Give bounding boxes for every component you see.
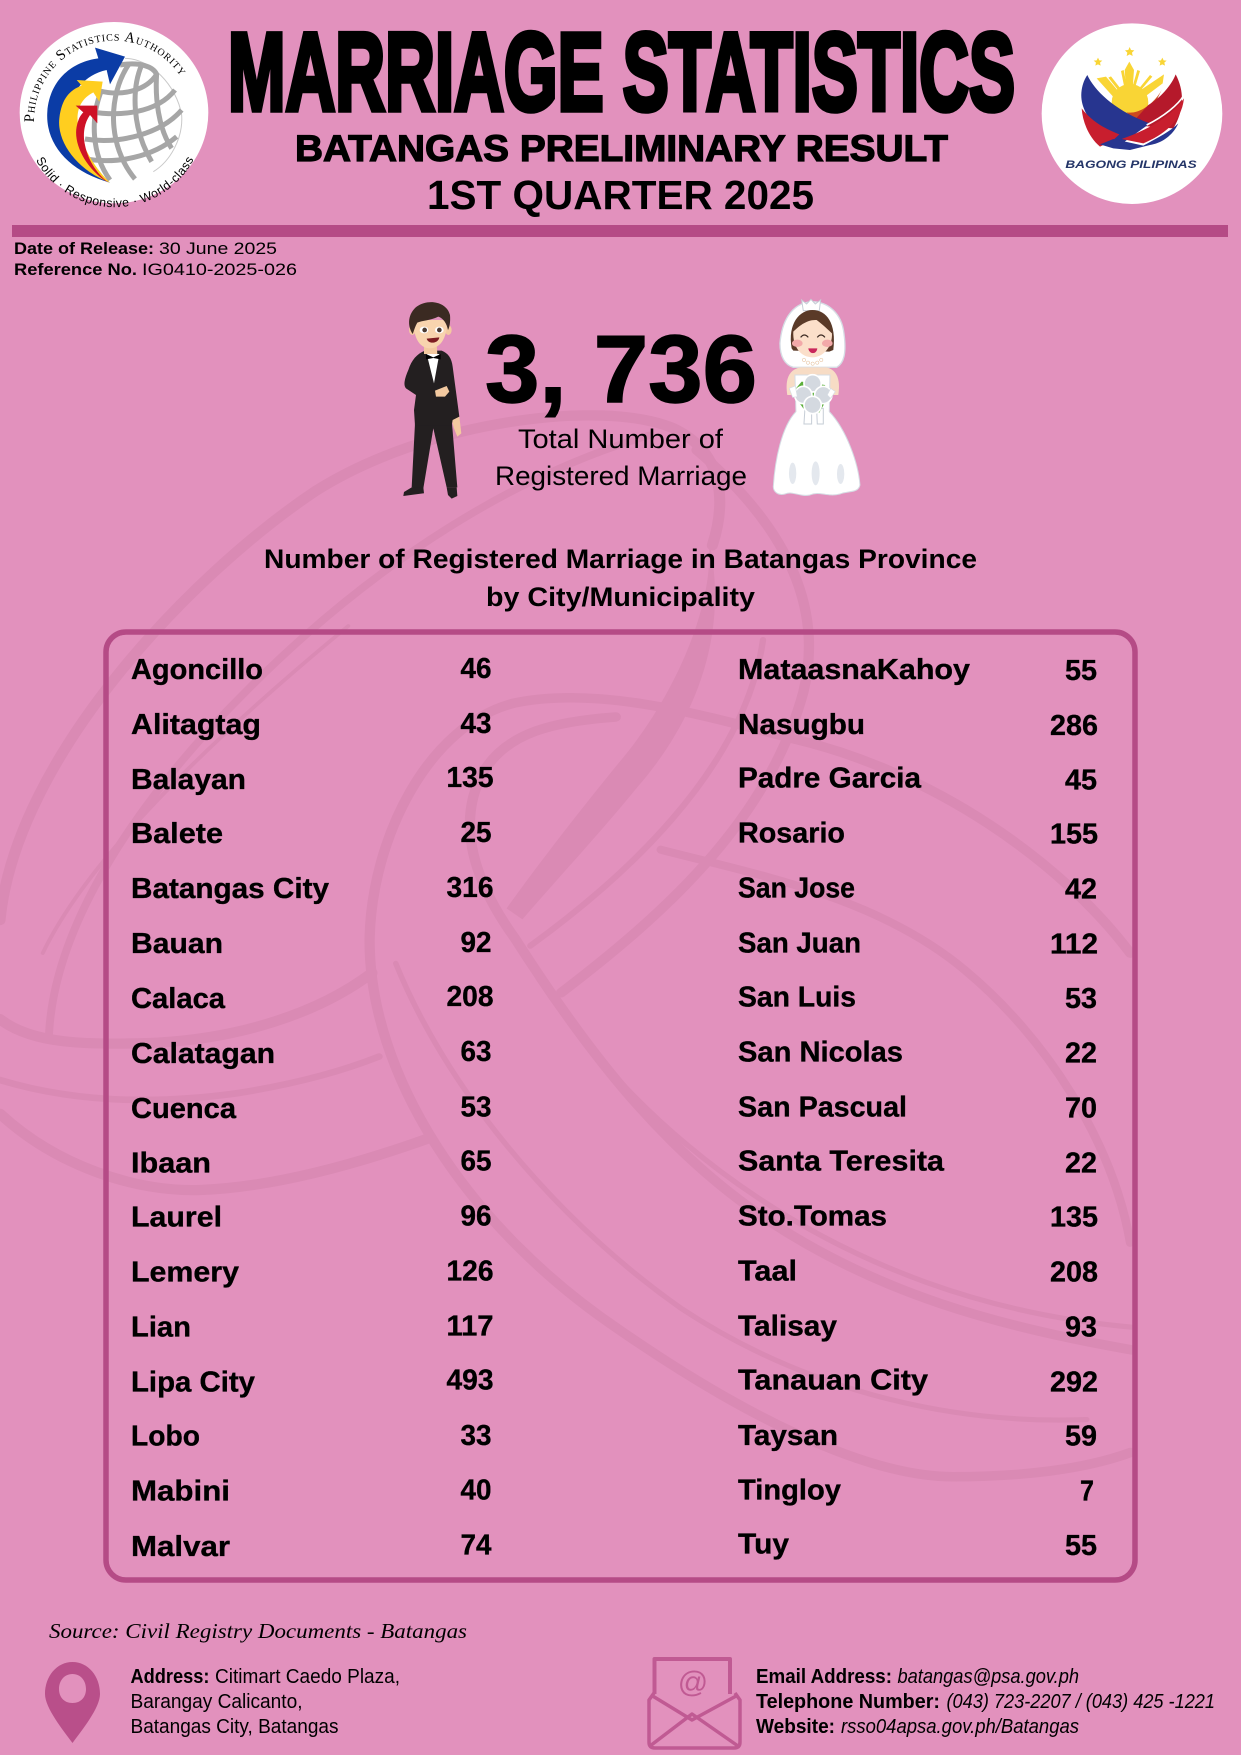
- row: Santa Teresita: Santa Teresita: [738, 1146, 945, 1178]
- row: Talisay: [738, 1310, 1097, 1344]
- logo: Bagong Pilipinas: [1042, 23, 1222, 204]
- heading: by city/municipality: [264, 544, 977, 612]
- contact details: Email Address:: [756, 1666, 892, 1688]
- row: Mabini: Mabini: [131, 1476, 230, 1508]
- row: Taysan: Taysan: [738, 1420, 838, 1452]
- row: Tuy: [738, 1528, 1097, 1562]
- row: Ibaan: 65: [460, 1146, 492, 1178]
- seal text: agency name: Philippine Statistics Authority: [24, 32, 186, 122]
- row: Calatagan: 63: [460, 1036, 492, 1068]
- row: Malvar: [131, 1530, 492, 1563]
- seal text: motto: Solid · Responsive · World-class: [37, 157, 193, 208]
- row: San Juan: San Juan: [738, 928, 861, 960]
- release date and reference number: [14, 239, 297, 279]
- row: Laurel: [131, 1200, 492, 1234]
- row: Balayan: [131, 762, 494, 796]
- address: Citimart Caedo Plaza,: [215, 1666, 400, 1688]
- row: Laurel: Laurel: [131, 1202, 222, 1234]
- row: Tingloy: [738, 1474, 1094, 1508]
- address: Batangas City, Batangas: [130, 1716, 338, 1738]
- row: San Nicolas: 22: [1065, 1038, 1097, 1070]
- subtitle: Batangas preliminary result: BATANGAS PRELIMINARY RESULT: [295, 128, 948, 169]
- row: Sto.Tomas: [738, 1200, 1098, 1234]
- row: Bauan: 92: [460, 927, 492, 959]
- row: Lian: [131, 1310, 494, 1344]
- release date and reference number: Date of Release:: [14, 239, 154, 258]
- row: Balete: 25: [460, 817, 492, 849]
- row: San Pascual: [738, 1092, 1097, 1124]
- row: Tanauan City: [738, 1364, 1098, 1398]
- row: Padre Garcia: 45: [1065, 764, 1097, 796]
- row: Batangas City: [131, 872, 494, 905]
- row: Balete: Balete: [131, 818, 223, 850]
- total number of registered marriage: Registered Marriage: [495, 461, 747, 491]
- panel frame: [106, 632, 1135, 1580]
- row: Calaca: [131, 981, 494, 1015]
- row: Malvar: 74: [460, 1530, 492, 1562]
- row: San Pascual: San Pascual: [738, 1092, 907, 1124]
- row: Lemery: Lemery: [131, 1256, 239, 1288]
- row: Tanauan City: Tanauan City: [738, 1364, 928, 1396]
- row: Calaca: Calaca: [131, 983, 226, 1015]
- row: Ibaan: [131, 1146, 492, 1180]
- row: Sto.Tomas: 135: [1050, 1202, 1098, 1234]
- row: Lipa City: [131, 1364, 494, 1398]
- row: San Luis: [738, 982, 1097, 1015]
- row: Batangas City: 316: [446, 872, 494, 904]
- row: Lemery: [131, 1256, 494, 1288]
- row: Alitagtag: Alitagtag: [131, 709, 261, 741]
- row: Lian: Lian: [131, 1312, 191, 1344]
- row: San Nicolas: San Nicolas: [738, 1036, 903, 1068]
- contact details: rsso04apsa.gov.ph/Batangas: [841, 1716, 1079, 1738]
- row: Cuenca: 53: [460, 1092, 492, 1124]
- row: Malvar: Malvar: [131, 1531, 230, 1563]
- release date and reference number: IG0410-2025-026: [142, 260, 297, 279]
- subtitle: quarter: 1ST QUARTER 2025: [427, 172, 814, 218]
- release date and reference number: Reference No.: [14, 260, 137, 279]
- row: Tingloy: 7: [1080, 1476, 1094, 1508]
- row: Lemery: 126: [446, 1256, 494, 1288]
- row: Calaca: 208: [446, 981, 494, 1013]
- row: Santa Teresita: [738, 1146, 1097, 1180]
- row: Agoncillo: Agoncillo: [131, 654, 263, 686]
- row: Taal: 208: [1050, 1256, 1098, 1288]
- row: Padre Garcia: Padre Garcia: [738, 762, 922, 794]
- row: Taal: [738, 1256, 1098, 1288]
- row: Agoncillo: 46: [460, 653, 492, 685]
- row: Balete: [131, 817, 492, 850]
- source note: Source: Civil Registry Documents - Batangas: [49, 1619, 467, 1643]
- row: MataasnaKahoy: [738, 654, 1097, 687]
- row: San Juan: 112: [1050, 928, 1098, 960]
- row: Talisay: 93: [1065, 1312, 1097, 1344]
- contact details: Website:: [756, 1716, 835, 1738]
- row: Rosario: Rosario: [738, 818, 845, 850]
- row: MataasnaKahoy: MataasnaKahoy: [738, 654, 970, 686]
- row: Laurel: 96: [460, 1200, 492, 1232]
- logo wordmark: BAGONG PILIPINAS: [1065, 159, 1197, 171]
- row: Lobo: [131, 1420, 492, 1452]
- row: Alitagtag: 43: [460, 708, 492, 740]
- divider bar: [12, 225, 1228, 237]
- row: Santa Teresita: 22: [1065, 1148, 1097, 1180]
- contact details: Telephone Number:: [756, 1691, 940, 1713]
- address: Address:: [130, 1666, 210, 1688]
- row: Agoncillo: [131, 653, 492, 686]
- envelope at sign: @: [678, 1666, 708, 1699]
- row: Tuy: Tuy: [738, 1528, 789, 1560]
- row: Mabini: 40: [460, 1474, 492, 1506]
- row: Lobo: 33: [460, 1420, 492, 1452]
- total number of registered marriage: [485, 316, 757, 491]
- row: Tanauan City: 292: [1050, 1366, 1098, 1398]
- panel: registered marriages by city or municipality: [106, 632, 1135, 1580]
- row: Cuenca: [131, 1092, 492, 1125]
- row: San Jose: [738, 872, 1097, 906]
- icon: groom: [403, 302, 461, 499]
- row: Nasugbu: Nasugbu: [738, 709, 865, 741]
- row: Calatagan: [131, 1036, 492, 1070]
- row: Calatagan: Calatagan: [131, 1038, 275, 1070]
- row: Nasugbu: [738, 709, 1098, 742]
- row: Balayan: 135: [446, 762, 494, 794]
- row: Tuy: 55: [1065, 1530, 1097, 1562]
- row: Padre Garcia: [738, 762, 1097, 796]
- row: Rosario: [738, 818, 1098, 850]
- row: Lipa City: Lipa City: [131, 1366, 255, 1398]
- row: San Jose: 42: [1065, 874, 1097, 906]
- row: Cuenca: Cuenca: [131, 1093, 237, 1125]
- total number of registered marriage: 3, 736: [485, 316, 757, 423]
- contact details: (043) 723-2207 / (043) 425 -1221: [946, 1691, 1215, 1713]
- row: Balayan: Balayan: [131, 764, 246, 796]
- address: [130, 1666, 400, 1738]
- total number of registered marriage: Total Number of: [518, 424, 724, 454]
- row: Mabini: [131, 1474, 492, 1508]
- row: Alitagtag: [131, 708, 492, 741]
- row: Batangas City: Batangas City: [131, 873, 329, 905]
- row: San Pascual: 70: [1065, 1092, 1097, 1124]
- contact details: [756, 1666, 1215, 1738]
- row: San Luis: 53: [1065, 983, 1097, 1015]
- address: Barangay Calicanto,: [130, 1691, 302, 1713]
- icon: envelope: [649, 1659, 740, 1748]
- row: Lian: 117: [446, 1310, 494, 1342]
- row: Tingloy: Tingloy: [738, 1474, 841, 1506]
- row: Bauan: [131, 927, 492, 960]
- icon: bride: [773, 299, 860, 495]
- row: Taysan: 59: [1065, 1420, 1097, 1452]
- release date and reference number: 30 June 2025: [159, 239, 277, 258]
- heading: by city/municipality: Number of Registered Marriage in Batangas Province: [264, 544, 977, 574]
- row: San Nicolas: [738, 1036, 1097, 1070]
- contact details: batangas@psa.gov.ph: [898, 1666, 1079, 1688]
- row: San Juan: [738, 928, 1098, 960]
- icon: location pin: [45, 1662, 100, 1743]
- row: Lobo: Lobo: [131, 1420, 200, 1452]
- row: Taal: Taal: [738, 1256, 797, 1288]
- row: Rosario: 155: [1050, 818, 1098, 850]
- row: San Jose: San Jose: [738, 872, 855, 904]
- row: MataasnaKahoy: 55: [1065, 655, 1097, 687]
- row: Lipa City: 493: [446, 1364, 494, 1396]
- row: San Luis: San Luis: [738, 982, 856, 1014]
- row: Bauan: Bauan: [131, 928, 223, 960]
- row: Taysan: [738, 1420, 1097, 1452]
- row: Ibaan: Ibaan: [131, 1148, 211, 1180]
- row: Talisay: Talisay: [738, 1310, 837, 1342]
- row: Sto.Tomas: Sto.Tomas: [738, 1200, 887, 1232]
- logo: Philippine Statistics Authority seal: [20, 22, 208, 208]
- heading: by city/municipality: by City/Municipality: [486, 582, 755, 612]
- row: Nasugbu: 286: [1050, 710, 1098, 742]
